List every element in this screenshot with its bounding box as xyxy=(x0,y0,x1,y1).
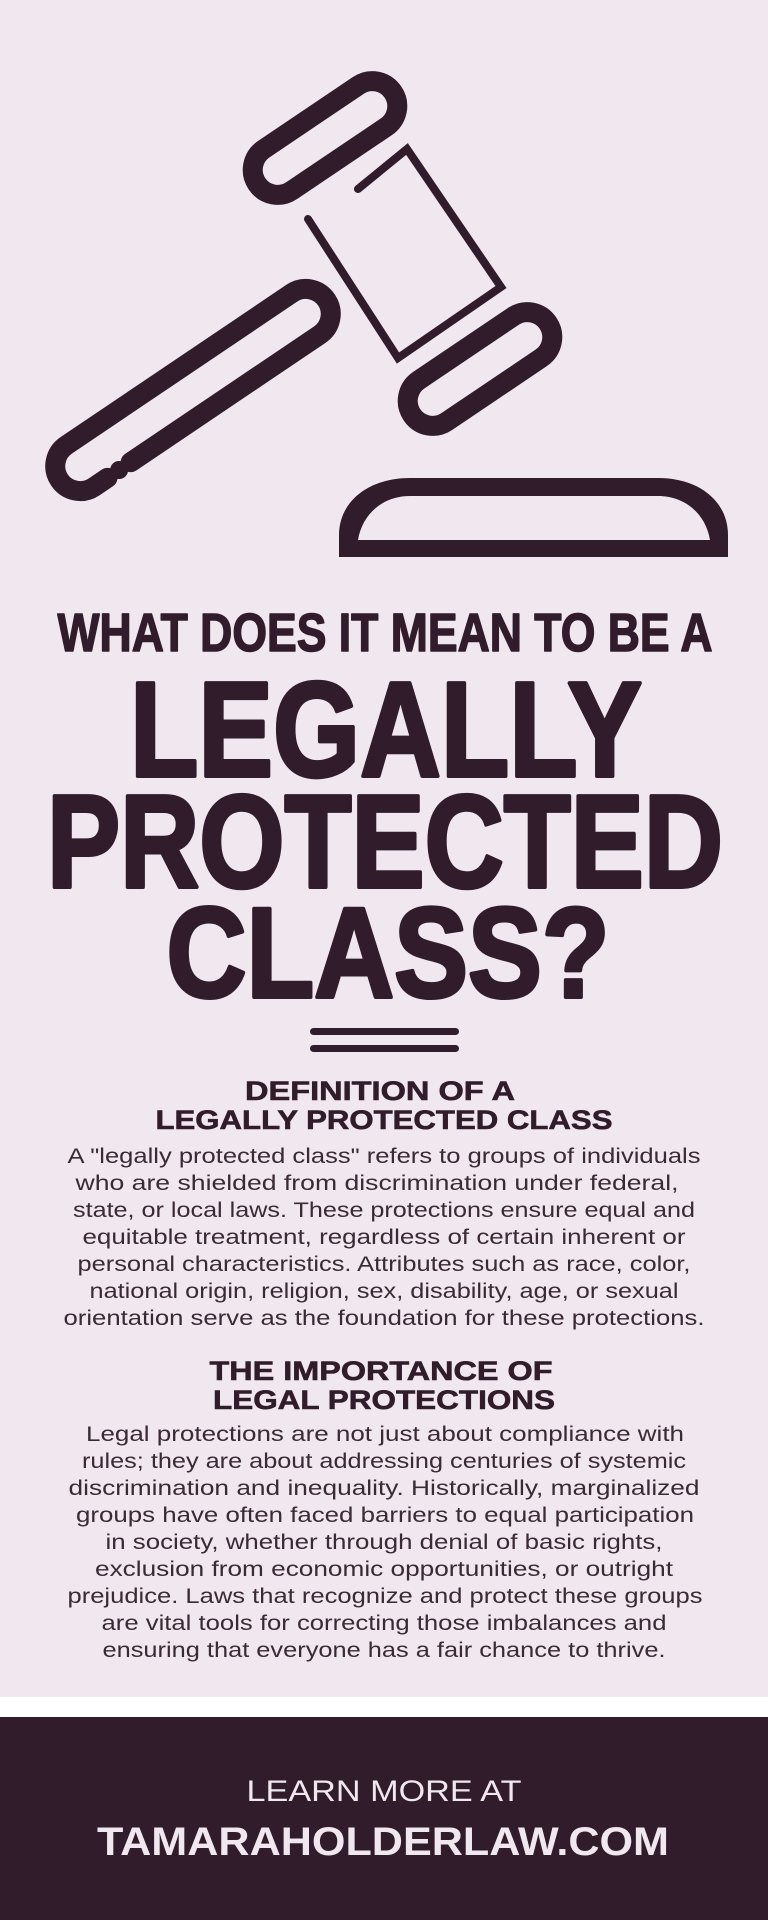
title xyxy=(47,603,723,1025)
gavel lower head xyxy=(398,302,562,436)
title: LEGALLY xyxy=(130,654,642,805)
heading: definition: DEFINITION OF A xyxy=(245,1076,515,1106)
text: definition body: equitable treatment, regardless of certain inherent or xyxy=(82,1226,686,1249)
divider lines xyxy=(310,1028,459,1052)
text: definition body: national origin, religion, sex, disability, age, or sexual xyxy=(90,1280,678,1303)
icon: gavel xyxy=(46,71,728,557)
text: importance body: Legal protections are not just about compliance with xyxy=(86,1423,684,1446)
gavel upper head xyxy=(243,71,407,205)
text: importance body: groups have often faced barriers to equal participation xyxy=(76,1504,694,1527)
title: CLASS? xyxy=(166,882,610,1025)
gavel neck xyxy=(308,149,501,358)
gavel handle xyxy=(46,279,345,508)
text: importance body: in society, whether through denial of basic rights, xyxy=(106,1531,662,1554)
text: importance body: ensuring that everyone has a fair chance to thrive. xyxy=(102,1639,666,1662)
text: definition body: state, or local laws. These protections ensure equal and xyxy=(73,1199,695,1222)
footer: learn more: LEARN MORE AT xyxy=(246,1775,522,1808)
heading: importance: THE IMPORTANCE OF xyxy=(210,1356,552,1386)
text: importance body: discrimination and inequality. Historically, marginalized xyxy=(68,1477,700,1500)
gavel sound block xyxy=(339,478,728,557)
heading: definition xyxy=(156,1076,612,1135)
footer: website: TAMARAHOLDERLAW.COM xyxy=(97,1820,669,1864)
heading: importance xyxy=(210,1356,555,1415)
text: importance body: prejudice. Laws that recognize and protect these groups xyxy=(68,1585,702,1608)
text: importance body: exclusion from economic opportunities, or outright xyxy=(95,1558,673,1581)
text: importance body: rules; they are about addressing centuries of systemic xyxy=(82,1450,686,1473)
heading: definition: LEGALLY PROTECTED CLASS xyxy=(156,1105,612,1135)
text: importance body: are vital tools for correcting those imbalances and xyxy=(102,1612,666,1635)
footer xyxy=(0,1717,768,1920)
text: definition body: personal characteristics. Attributes such as race, color, xyxy=(78,1253,690,1276)
text: definition body: orientation serve as the foundation for these protections. xyxy=(64,1307,704,1330)
text: definition body xyxy=(64,1145,704,1330)
text: definition body: who are shielded from discrimination under federal, xyxy=(74,1172,678,1195)
text: importance body xyxy=(68,1423,702,1662)
section: definition xyxy=(64,1076,704,1330)
heading: importance: LEGAL PROTECTIONS xyxy=(213,1385,555,1415)
text: definition body: A "legally protected class" refers to groups of individuals xyxy=(68,1145,700,1168)
section: importance xyxy=(68,1356,702,1662)
